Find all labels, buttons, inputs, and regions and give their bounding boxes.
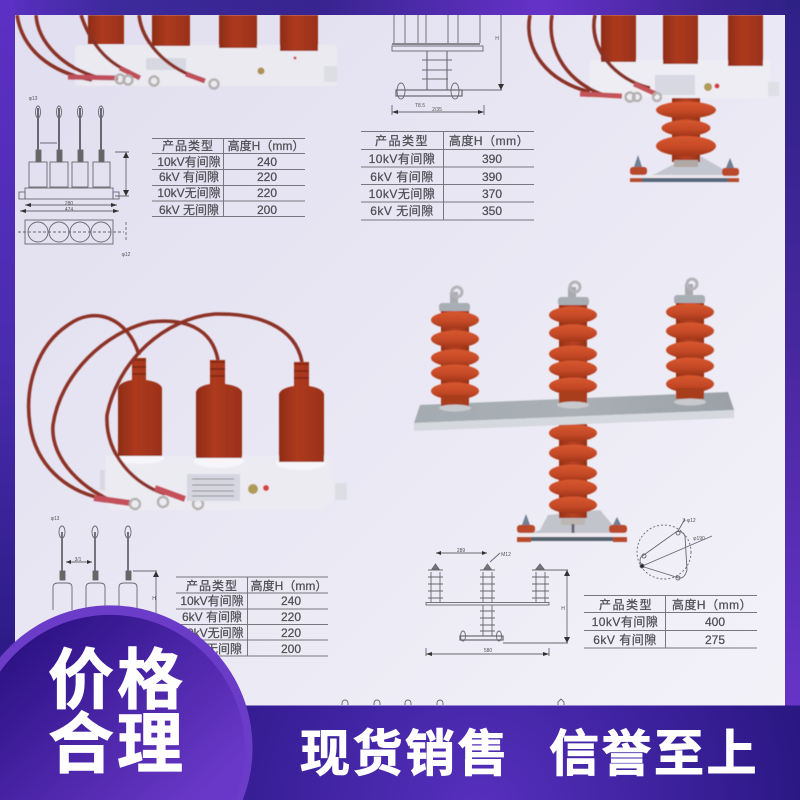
spec table: three-phase models: 10kV有间隙 xyxy=(592,615,658,629)
spec table: top-centre models: 10kV有间隙 xyxy=(369,152,435,166)
technical drawing: top-centre arrester xyxy=(392,15,504,115)
spec table: middle-left models xyxy=(176,577,328,656)
spec table: middle-left models: 220 xyxy=(281,626,301,640)
spec table: four-pole models: 10kV有间隙 xyxy=(157,155,221,169)
product photo: top-right arrester on insulator xyxy=(529,15,779,182)
spec table: four-pole models: 240 xyxy=(257,155,277,169)
spec table: middle-left models: 6kV 有间隙 xyxy=(182,610,242,624)
technical drawing: top-centre arrester: H xyxy=(495,36,499,42)
technical drawing: middle-left three-pole arrester: 3/1 xyxy=(75,557,82,563)
technical drawing: four-pole arrester xyxy=(18,96,131,258)
spec table: top-centre models: 6kV 无间隙 xyxy=(370,204,434,218)
spec table: middle-left models: 240 xyxy=(281,594,301,608)
technical drawing: four-pole arrester: φ12 xyxy=(122,252,131,258)
spec table: top-centre models: 390 xyxy=(482,152,502,166)
technical drawing: circular base plan: 3-φ12 xyxy=(682,518,696,524)
technical drawing: three-phase arrester elevation: M12 xyxy=(501,552,511,558)
technical drawing: top-centre arrester: T8.5 xyxy=(415,103,425,109)
spec table: middle-left models: 产品类型 xyxy=(186,579,238,593)
footer slogan: reputation first: 信誉至上 xyxy=(549,726,759,782)
technical drawing: top-centre arrester: 2/35 xyxy=(432,107,442,113)
frame: top band xyxy=(0,0,800,15)
spec table: four-pole models: 200 xyxy=(257,203,277,217)
spec table: four-pole models: 6kV 无间隙 xyxy=(159,203,219,217)
technical drawing: three-phase arrester elevation xyxy=(426,548,570,656)
spec table: three-phase models xyxy=(584,595,757,648)
spec table: middle-left models: 6kV 无间隙 xyxy=(182,642,242,656)
technical drawing: four-pole arrester: φ13 xyxy=(29,96,38,102)
technical drawing: middle-left three-pole arrester: φ13 xyxy=(51,516,60,522)
spec table: middle-left models: 10kV有间隙 xyxy=(180,594,244,608)
technical drawing: circular base plan xyxy=(637,518,712,580)
badge text: reasonable price: 价格 xyxy=(48,643,186,717)
technical drawing: middle-left three-pole arrester: H xyxy=(152,596,156,602)
spec table: top-centre models: 390 xyxy=(482,170,502,184)
technical drawing: four-pole arrester: 474 xyxy=(65,207,73,213)
spec table: three-phase models: 高度H（mm） xyxy=(672,597,752,612)
spec table: four-pole models: 10kV无间隙 xyxy=(157,186,221,200)
left column xyxy=(431,287,479,407)
spec table: four-pole models: 6kV 有间隙 xyxy=(159,170,219,184)
spec table: middle-left models: 高度H（mm） xyxy=(251,578,327,593)
spec table: four-pole models: 产品类型 xyxy=(162,139,214,153)
technical drawing: four-pole arrester: 280 xyxy=(65,201,73,207)
spec table: middle-left models: 10kV无间隙 xyxy=(180,626,244,640)
spec table: top-centre models: 370 xyxy=(482,187,502,201)
right column xyxy=(666,279,714,392)
spec table: top-centre models: 350 xyxy=(482,204,502,218)
spec table: three-phase models: 产品类型 xyxy=(599,598,653,612)
lower column xyxy=(517,422,627,542)
spec table: top-centre models xyxy=(361,131,534,220)
footer band xyxy=(0,706,800,800)
frame: left band xyxy=(0,0,15,706)
product photo: top-left arrester block xyxy=(17,15,337,88)
badge text line two: 合理 xyxy=(48,707,186,781)
product photo: middle-left arrester with wires xyxy=(29,314,347,510)
clipped drawing marks above footer xyxy=(342,699,564,705)
spec table: three-phase models: 6kV 有间隙 xyxy=(593,633,657,647)
spec table: four-pole models: 220 xyxy=(257,170,277,184)
spec table: four-pole models: 220 xyxy=(257,186,277,200)
spec table: three-phase models: 275 xyxy=(705,633,725,647)
technical drawing: three-phase arrester elevation: 580 xyxy=(484,648,492,654)
centre column xyxy=(549,282,597,403)
spec table: four-pole models: 高度H（mm） xyxy=(228,138,304,153)
technical drawing: middle-left three-pole arrester xyxy=(51,516,159,615)
frame: right band xyxy=(785,0,800,706)
spec table: middle-left models: 200 xyxy=(281,642,301,656)
technical drawing: three-phase arrester elevation: H xyxy=(561,606,565,612)
spec table: top-centre models: 高度H（mm） xyxy=(449,133,529,148)
spec table: top-centre models: 10kV无间隙 xyxy=(369,187,435,201)
price badge circle xyxy=(0,605,253,800)
spec table: top-centre models: 产品类型 xyxy=(375,134,429,148)
footer slogan: in-stock sales: 现货销售 xyxy=(300,726,510,782)
spec table: three-phase models: 400 xyxy=(705,615,725,629)
technical drawing: three-phase arrester elevation: 289 xyxy=(457,548,465,554)
spec table: top-centre models: 6kV 有间隙 xyxy=(370,170,434,184)
technical drawing: circular base plan: φ190 xyxy=(693,536,705,542)
spec table: four-pole models xyxy=(152,138,305,217)
product photo: middle-right three-phase arrester on bar xyxy=(414,279,734,542)
spec table: middle-left models: 220 xyxy=(281,610,301,624)
steel bar xyxy=(414,388,734,431)
